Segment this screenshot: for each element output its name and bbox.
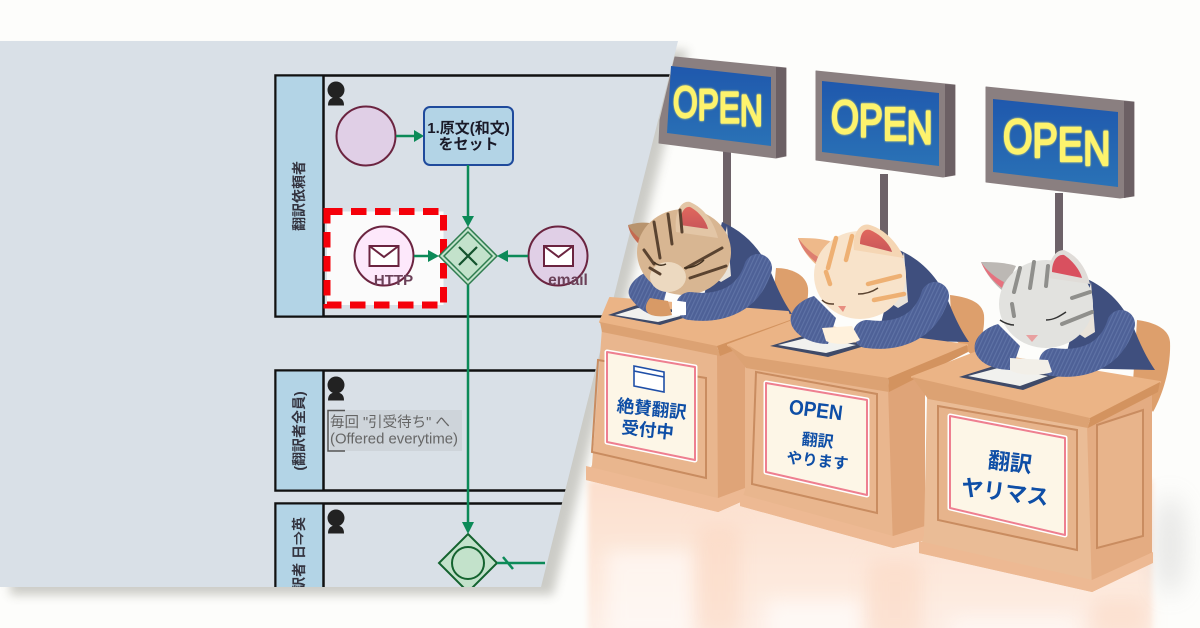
outgoing conditional flow — [497, 557, 545, 569]
reflective floor — [588, 480, 1152, 628]
sign 1: O — [673, 78, 698, 127]
HTTP message event: HTTP — [374, 272, 413, 289]
lane title: 翻訳依頼者 — [291, 161, 307, 231]
annotation — [328, 410, 462, 451]
HTTP message event — [354, 226, 414, 289]
start event — [336, 106, 396, 166]
highlight: red dashed box — [327, 212, 444, 305]
sign 1 — [659, 57, 786, 158]
sign card 1: 絶賛翻訳 — [616, 395, 688, 423]
sign 1: E — [719, 83, 740, 133]
cat 3 — [975, 250, 1121, 375]
icon: document window — [634, 366, 664, 392]
task box — [424, 107, 513, 165]
lane: English translators — [274, 502, 562, 587]
clipboard 2 — [770, 334, 868, 357]
sign 2 — [816, 71, 955, 177]
sign 1: N — [740, 86, 763, 136]
event gateway — [439, 534, 497, 592]
illustration: sleeping cats at desks — [586, 57, 1170, 592]
icon: person — [328, 510, 344, 534]
sign card 2: やります — [786, 449, 849, 473]
panel: BPMN workflow diagram — [0, 41, 678, 587]
cat 2 — [791, 225, 935, 344]
desk 1 — [586, 298, 790, 512]
email message event: email — [548, 272, 588, 289]
icon: person — [328, 82, 344, 106]
task box: 1.原文(和文) — [427, 119, 510, 137]
sign poles — [723, 150, 1063, 263]
arrow: email to gateway — [497, 250, 528, 262]
lane: translation requester — [274, 74, 670, 318]
desk shadow on the right — [1154, 495, 1186, 595]
sign card 2 — [766, 383, 867, 495]
clipboard 1 — [608, 305, 700, 325]
sign 2: P — [859, 95, 883, 147]
task box: をセット — [438, 136, 499, 153]
desk 2 — [728, 322, 968, 548]
panel shadow — [10, 50, 688, 595]
clipboard 3 — [959, 365, 1062, 390]
sign 3: E — [1058, 119, 1083, 172]
exclusive gateway — [439, 227, 497, 285]
sign 1: P — [698, 80, 719, 130]
sign 2: N — [907, 102, 933, 154]
lane title: (翻訳者全員) — [291, 391, 307, 471]
email message event — [528, 226, 588, 289]
sign card 2: OPEN — [788, 396, 844, 425]
cat 1 — [628, 202, 758, 316]
arrow: HTTP to gateway — [414, 250, 439, 262]
desk 3 — [912, 352, 1160, 592]
sign 2: E — [883, 99, 907, 150]
sign card 1 — [607, 352, 695, 460]
cat 3 suit body — [1063, 278, 1155, 370]
lane: all translators — [274, 369, 596, 492]
arrow: task to gateway — [462, 165, 474, 227]
sign card 1: 受付中 — [620, 417, 675, 443]
sign card 3 — [950, 416, 1065, 535]
sign 3: O — [1003, 111, 1033, 164]
icon: person — [328, 376, 344, 400]
lane title: 翻訳者 日⇒英 — [291, 517, 307, 605]
sign 2: O — [831, 92, 859, 143]
annotation: 毎回 "引受待ち" へ — [330, 414, 450, 431]
sign card 2: 翻訳 — [801, 430, 834, 452]
cat 1 suit body — [700, 222, 792, 314]
sign 3: P — [1033, 115, 1058, 168]
arrow: gateway to lower lane — [462, 285, 474, 534]
cat 2 suit body — [877, 250, 969, 342]
annotation: (Offered everytime) — [330, 432, 458, 448]
sign 3 — [986, 87, 1134, 198]
sign 3: N — [1083, 123, 1110, 176]
arrow: start to task — [396, 130, 424, 142]
sign card 3: 翻訳 — [987, 447, 1033, 478]
chair backs — [772, 268, 1170, 412]
sign card 3: ヤリマス — [960, 475, 1050, 510]
